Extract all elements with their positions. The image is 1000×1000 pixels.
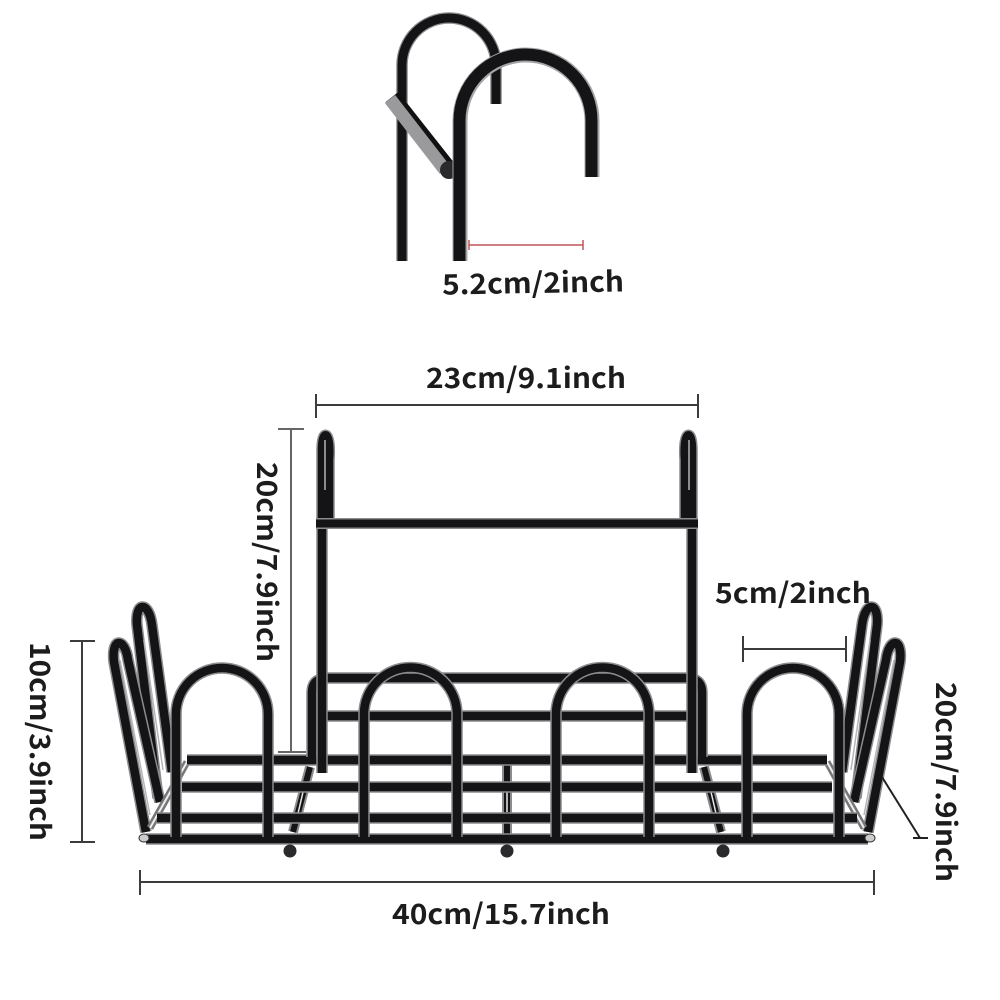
label: side depth: 20cm/7.9inch <box>927 682 967 882</box>
back hanging frame <box>312 435 702 773</box>
label: hook width: 5.2cm/2inch <box>442 260 624 304</box>
dimension: hook width <box>469 240 583 250</box>
base grid <box>139 760 875 858</box>
dimension: side height <box>70 641 95 842</box>
dimension: rack top width <box>316 394 698 418</box>
dimension: frame height <box>278 429 306 752</box>
wire rack illustration <box>114 435 900 858</box>
left side arches <box>114 607 172 832</box>
front hook <box>460 55 592 261</box>
label: side height: 10cm/3.9inch <box>21 642 61 841</box>
right side arches <box>842 607 900 832</box>
label: rack top width: 23cm/9.1inch <box>426 357 626 397</box>
label: frame height: 20cm/7.9inch <box>248 462 288 662</box>
dimension: arch width <box>743 636 846 662</box>
connecting bar <box>390 97 458 179</box>
dimension: overall width <box>140 870 874 895</box>
label: arch width: 5cm/2inch <box>715 572 871 612</box>
label: overall width: 40cm/15.7inch <box>392 893 610 933</box>
hook detail illustration <box>390 18 592 261</box>
front arches <box>176 668 839 837</box>
back hook <box>402 18 496 261</box>
dimension: side depth <box>882 777 928 838</box>
